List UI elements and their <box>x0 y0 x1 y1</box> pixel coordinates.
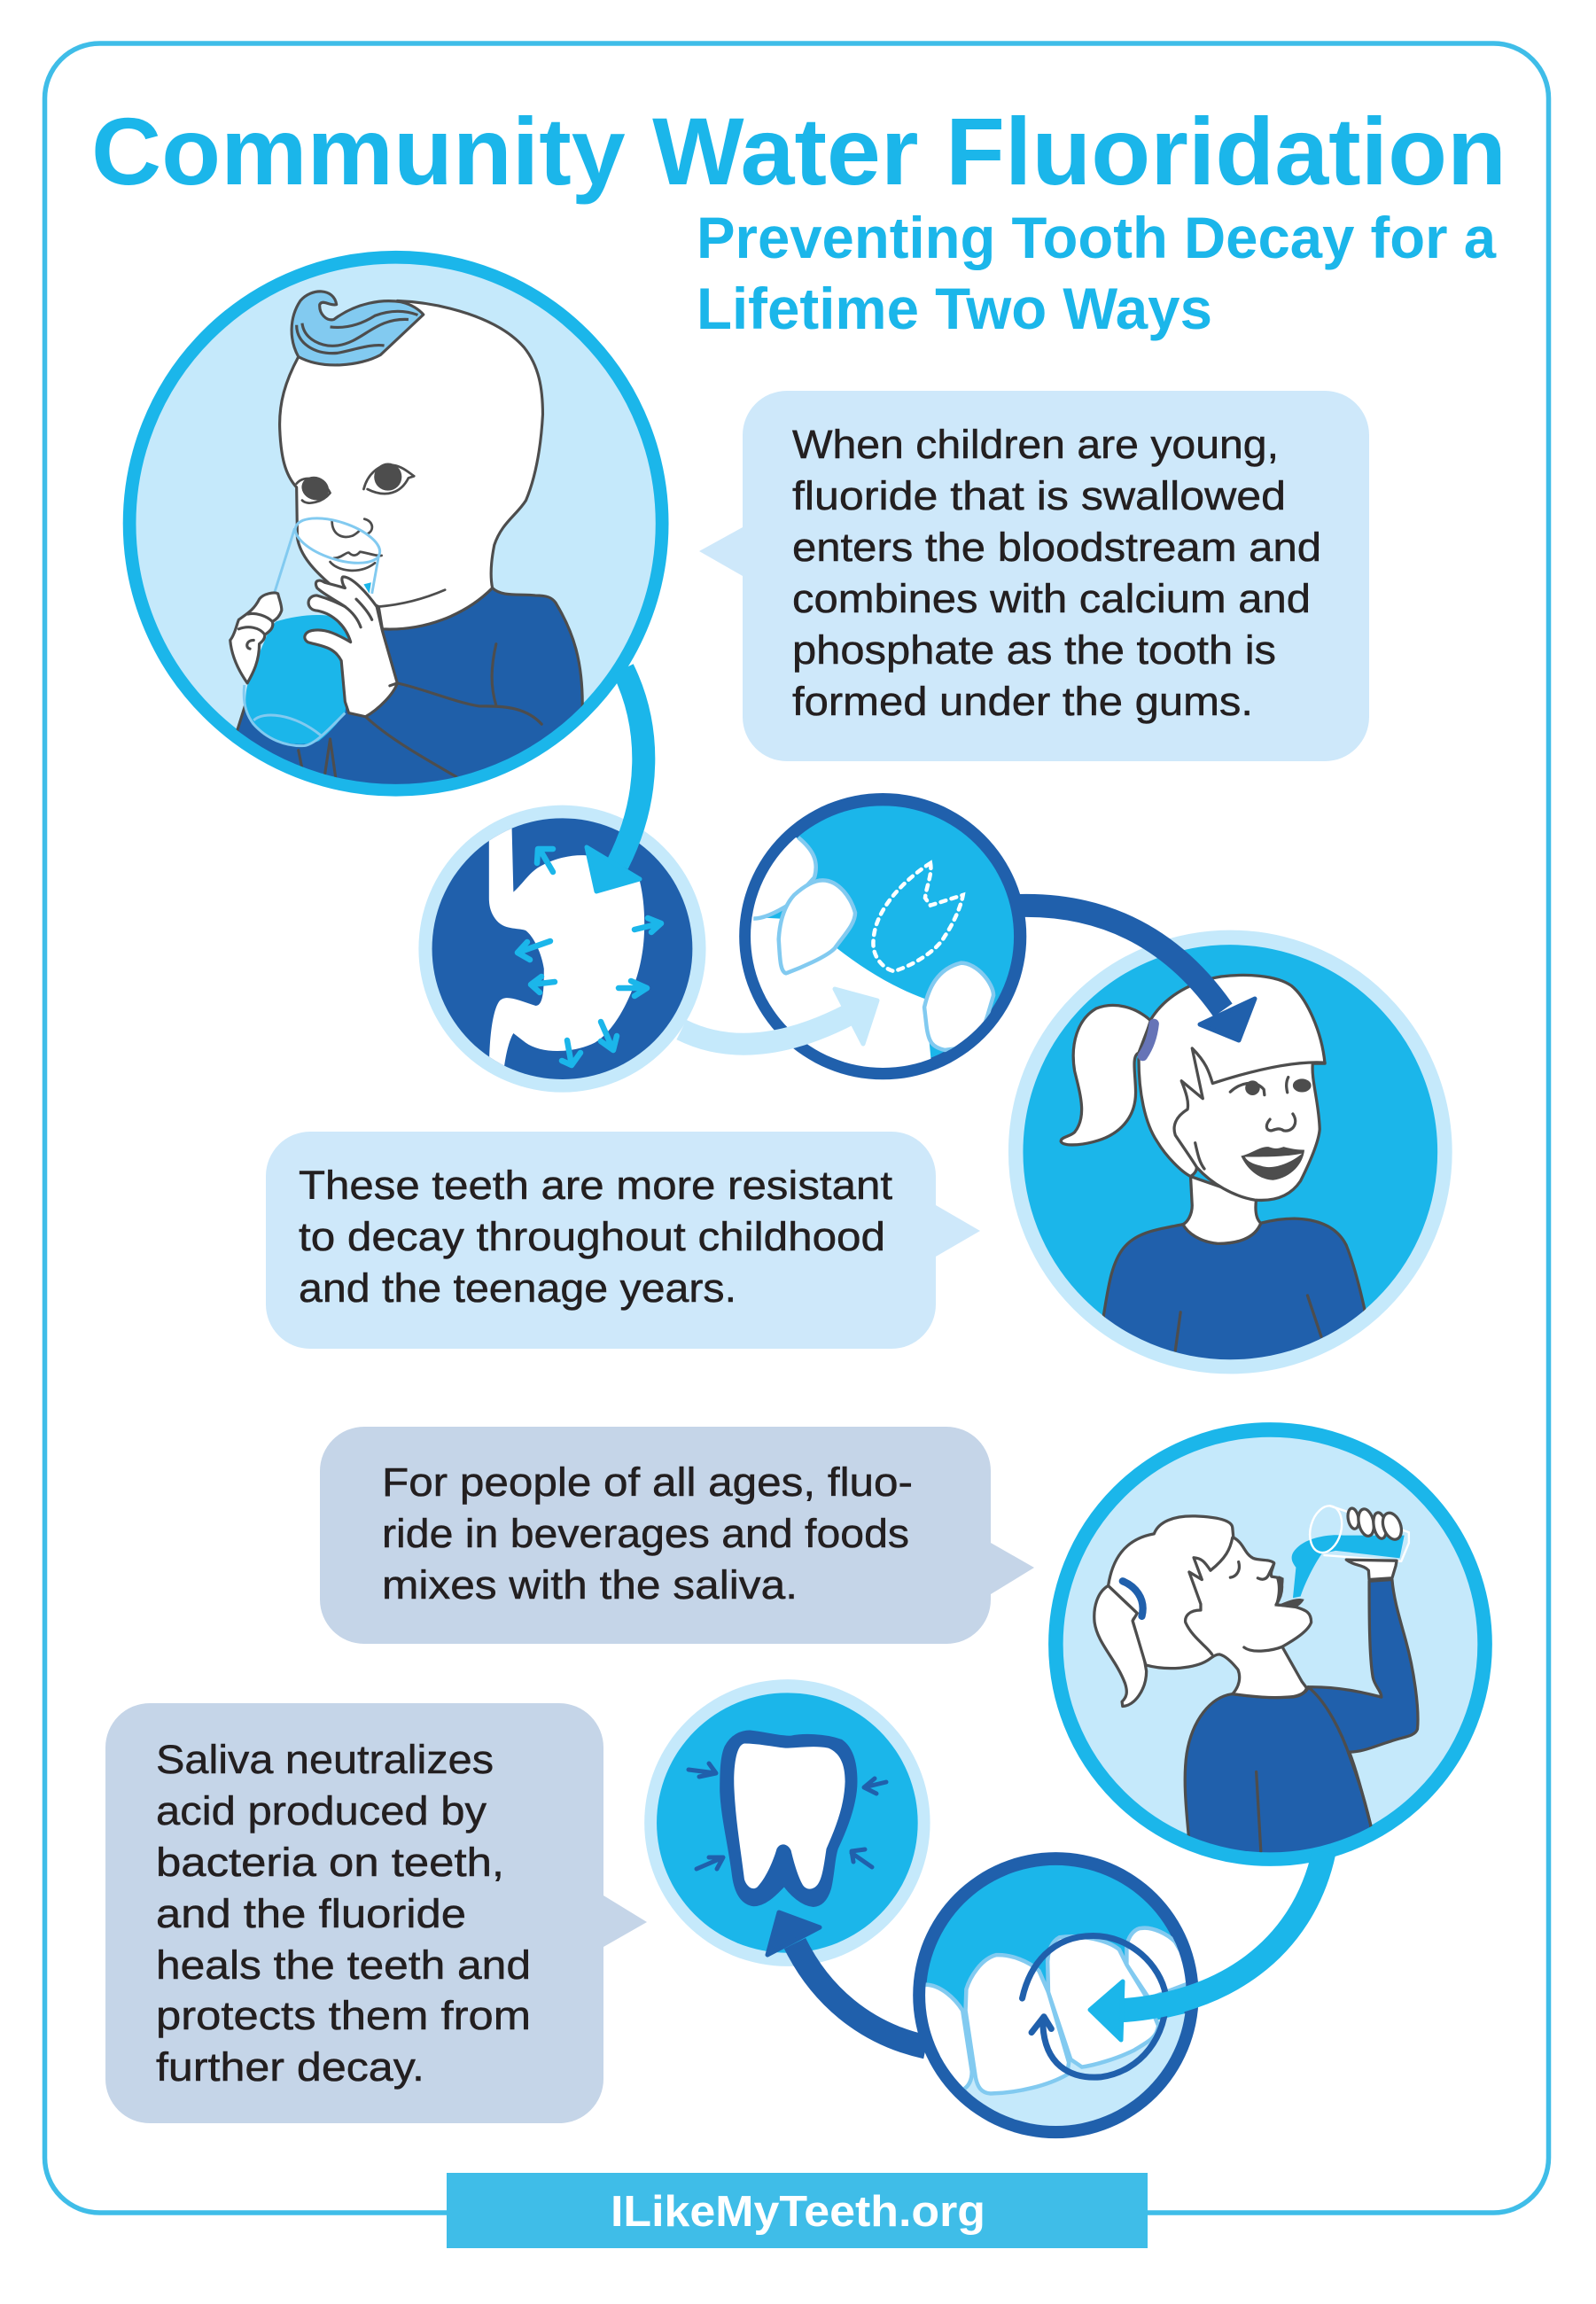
illustration: tooth being healed <box>644 1679 930 1966</box>
callout: when children are young: formed under the gums. <box>792 679 1253 724</box>
girl face <box>1230 1078 1312 1180</box>
callout: teeth more resistant: and the teenage years. <box>299 1265 736 1311</box>
callout: teeth more resistant: to decay throughout childhood <box>299 1214 885 1259</box>
callout: saliva neutralizes acid: acid produced by <box>156 1788 487 1833</box>
callout: saliva neutralizes acid: bacteria on teeth, <box>156 1840 504 1885</box>
glass held up <box>1305 1502 1409 1561</box>
callout: teeth more resistant <box>266 1132 980 1349</box>
baby head <box>280 300 542 629</box>
callout: when children are young: enters the bloodstream and <box>792 525 1321 570</box>
arrow: teeth to healed tooth <box>767 1912 926 2047</box>
callout: people of all ages: ride in beverages and foods <box>382 1511 909 1556</box>
title: Community Water Fluoridation <box>91 97 1506 205</box>
footer banner: ILikeMyTeeth.org <box>611 2188 985 2236</box>
water stream <box>1292 1535 1405 1598</box>
illustration: girl drinking water <box>1055 1429 1485 1876</box>
baby hair <box>292 292 424 365</box>
callout: when children are young: When children are young, <box>792 422 1279 467</box>
shirt fold lines <box>299 644 541 778</box>
arrow: forming tooth to smiling girl <box>1018 906 1255 1040</box>
dotted unerupted tooth <box>873 863 963 971</box>
illustration: baby drinking from a glass <box>129 257 662 798</box>
tooth outline <box>720 1732 856 1906</box>
subtitle: Preventing Tooth Decay for a <box>697 205 1497 270</box>
illustration: smiling girl <box>1016 938 1444 1380</box>
front hand <box>305 577 397 717</box>
callout: saliva neutralizes acid: further decay. <box>156 2044 424 2090</box>
callout: saliva neutralizes acid <box>105 1703 647 2123</box>
baby shirt <box>237 588 582 798</box>
gum area <box>751 837 814 918</box>
callout: when children are young <box>699 391 1369 761</box>
callout: when children are young: combines with calcium and <box>792 576 1311 621</box>
ponytail <box>1061 1005 1151 1145</box>
hair band <box>1142 1024 1154 1056</box>
glass outline <box>244 510 385 746</box>
illustration: teeth with saliva swirl <box>913 1852 1199 2138</box>
shirt lines <box>1257 1687 1371 1851</box>
hand and fingers <box>1346 1507 1405 1580</box>
callout: when children are young: fluoride that is swallowed <box>792 473 1286 518</box>
arrow: drinking girl to teeth <box>1090 1852 1324 2040</box>
back hand <box>230 593 282 683</box>
callout: saliva neutralizes acid: heals the teeth and <box>156 1942 531 1988</box>
illustration: tooth cross-section forming under the gum <box>418 806 706 1093</box>
swirl arrow <box>1023 1935 1166 2077</box>
callout: teeth more resistant: These teeth are more resistant <box>299 1163 893 1208</box>
arrow: tooth cross-section to forming tooth <box>681 989 877 1044</box>
small arrows: minerals entering the tooth <box>518 849 661 1065</box>
gum line <box>753 837 816 919</box>
hair band <box>1123 1581 1143 1616</box>
right tooth <box>1047 1936 1158 2067</box>
lower gum <box>939 2013 1186 2126</box>
water at the lips <box>363 582 371 594</box>
callout: saliva neutralizes acid: Saliva neutralizes <box>156 1737 494 1782</box>
shirt lines <box>1175 1296 1321 1350</box>
subtitle: Lifetime Two Ways <box>697 276 1212 341</box>
callout: people of all ages <box>320 1427 1034 1644</box>
ponytail <box>1094 1585 1147 1706</box>
callout: saliva neutralizes acid: and the fluoride <box>156 1891 466 1936</box>
bangs and ear <box>1174 1048 1325 1169</box>
small arrows pointing at the tooth <box>689 1763 886 1869</box>
callout: saliva neutralizes acid: protects them from <box>156 1993 531 2038</box>
left tooth <box>922 1985 972 2090</box>
head and neck <box>1109 1516 1312 1698</box>
illustration: tooth forming in gum <box>725 793 1026 1079</box>
water in glass <box>245 615 353 744</box>
middle tooth <box>966 1955 1069 2094</box>
arrow: baby to tooth cross-section <box>587 669 643 891</box>
bangs and face lines <box>1186 1537 1282 1654</box>
emerged tooth left <box>779 880 855 973</box>
tooth body <box>734 1743 845 1889</box>
head and hair <box>1139 975 1325 1200</box>
open mouth <box>1274 1576 1304 1607</box>
drinking girl shirt and arm <box>1185 1580 1418 1876</box>
callout: people of all ages: For people of all ages, fluo- <box>382 1459 913 1505</box>
callout: people of all ages: mixes with the saliva. <box>382 1562 798 1607</box>
emerged tooth right <box>924 963 993 1050</box>
neck <box>1183 1177 1261 1243</box>
callout: when children are young: phosphate as the tooth is <box>792 627 1276 673</box>
girl shirt <box>1102 1218 1366 1359</box>
subtitle <box>697 205 1497 341</box>
baby face <box>297 463 445 607</box>
far right tooth <box>1126 1928 1197 1998</box>
footer banner <box>447 2173 1148 2248</box>
